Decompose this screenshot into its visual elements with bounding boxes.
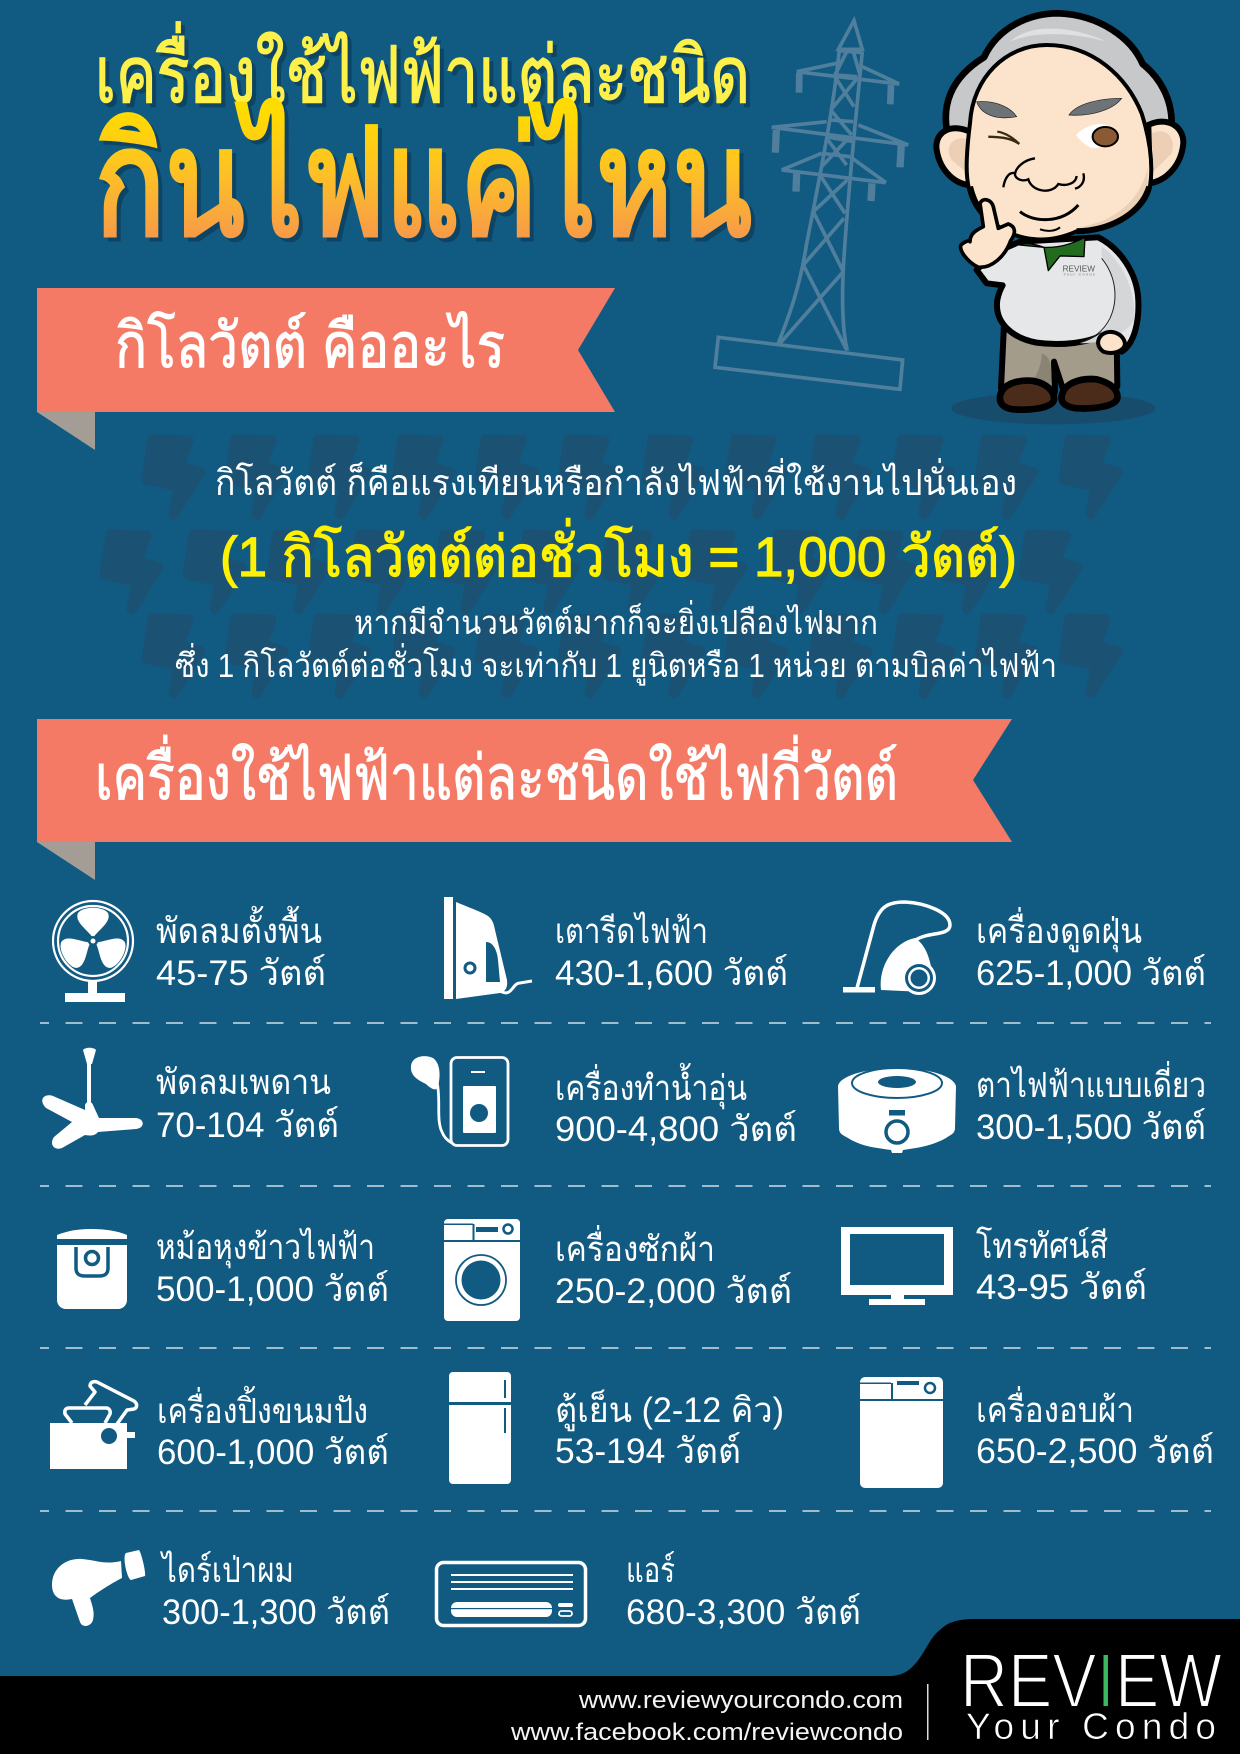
icon: hair dryer [52, 1550, 145, 1626]
footer links [510, 1687, 903, 1746]
watts: 300-1,300 วัตต์ [162, 1593, 390, 1632]
banner: what is a kilowatt: กิโลวัตต์ คืออะไร [115, 311, 505, 381]
jaw outline accent [970, 187, 1149, 231]
shirt [977, 237, 1138, 352]
label: พัดลมเพดาน [156, 1063, 331, 1102]
watts: 53-194 วัตต์ [555, 1432, 741, 1471]
item: rice cooker [57, 1227, 389, 1309]
mascot: old man in polo shirt [936, 13, 1183, 424]
label: ไดร์เป่าผม [159, 1550, 294, 1590]
banner: watts per appliance [37, 719, 1012, 880]
title [95, 22, 752, 267]
watts: 600-1,000 วัตต์ [157, 1433, 389, 1472]
label: ตาไฟฟ้าแบบเดี่ยว [976, 1061, 1206, 1105]
icon: clothes dryer [860, 1377, 943, 1488]
label: โทรทัศน์สี [976, 1226, 1108, 1266]
open eye [1076, 124, 1119, 148]
banner: what is a kilowatt [37, 288, 615, 450]
explanation text block: ซึ่ง 1 กิโลวัตต์ต่อชั่วโมง จะเท่ากับ 1 ยูนิตหรือ 1 หน่วย ตามบิลค่าไฟฟ้า [175, 643, 1057, 686]
icon: television [841, 1227, 953, 1305]
item: clothes dryer [860, 1377, 1214, 1488]
watts: 650-2,500 วัตต์ [976, 1432, 1214, 1471]
watts: 43-95 วัตต์ [976, 1268, 1147, 1307]
item: air conditioner [436, 1551, 861, 1632]
explanation text block [175, 458, 1057, 686]
item: television [841, 1226, 1147, 1307]
collar [1019, 237, 1085, 271]
hand on hip [1098, 332, 1125, 353]
watts: 70-104 วัตต์ [156, 1106, 339, 1145]
shirt logo: REVIEW [1063, 264, 1095, 273]
icon: air conditioner [436, 1562, 586, 1626]
label: พัดลมตั้งพื้น [156, 905, 322, 951]
icon: toaster [50, 1382, 137, 1469]
icon: washing machine [444, 1219, 520, 1321]
watts: 900-4,800 วัตต์ [555, 1110, 797, 1149]
shirt logo [1063, 264, 1096, 277]
label: เตารีดไฟฟ้า [555, 911, 708, 951]
icon: hotplate [838, 1068, 956, 1153]
explanation text block: (1 กิโลวัตต์ต่อชั่วโมง = 1,000 วัตต์) [220, 518, 1017, 588]
item: vacuum cleaner [843, 902, 1206, 995]
watts: 500-1,000 วัตต์ [156, 1270, 389, 1309]
shoes [1000, 379, 1117, 410]
icon: vacuum cleaner [843, 902, 950, 995]
title: กินไฟแค่ไหน [95, 99, 752, 267]
background lightning bolts [104, 439, 1118, 694]
ground shadow [951, 392, 1155, 424]
item: iron [444, 897, 788, 999]
winking eye [988, 132, 1019, 144]
electricity pylon [715, 21, 908, 389]
item: refrigerator [449, 1372, 784, 1484]
item: washing machine [444, 1219, 792, 1321]
item: standing fan [53, 901, 326, 1002]
footer bar [0, 1619, 1240, 1754]
watts: 45-75 วัตต์ [156, 954, 326, 993]
label: ตู้เย็น (2-12 คิว) [555, 1389, 784, 1431]
label: เครื่องอบผ้า [976, 1386, 1134, 1430]
pointing hand [961, 200, 1014, 267]
icon: refrigerator [449, 1372, 511, 1484]
logo: Review Your Condo: REVIEW [960, 1638, 1222, 1724]
ears [936, 122, 1183, 185]
footer links: www.facebook.com/reviewcondo [510, 1719, 903, 1746]
label: แอร์ [626, 1551, 675, 1590]
item: water heater [411, 1056, 797, 1149]
logo: Review Your Condo: Your Condo [966, 1706, 1216, 1747]
banner: watts per appliance: เครื่องใช้ไฟฟ้าแต่ละชนิดใช้ไฟกี่วัตต์ [95, 735, 898, 813]
nose and cheeks [1003, 158, 1084, 191]
watts: 250-2,000 วัตต์ [555, 1272, 792, 1311]
trousers [1001, 325, 1117, 392]
icon: ceiling fan [42, 1048, 143, 1149]
item: ceiling fan [42, 1048, 339, 1149]
watts: 625-1,000 วัตต์ [976, 954, 1206, 993]
icon: standing fan [53, 901, 133, 1002]
label: เครื่องทำน้ำอุ่น [555, 1062, 747, 1109]
label: เครื่องดูดฝุ่น [976, 907, 1142, 952]
icon: water heater [411, 1056, 508, 1146]
footer divider [927, 1684, 928, 1740]
explanation text block: กิโลวัตต์ ก็คือแรงเทียนหรือกำลังไฟฟ้าที่ใช้งานไปนั่นเอง [215, 458, 1017, 503]
hair [946, 13, 1172, 167]
shirt logo: Your Condo [1063, 272, 1096, 277]
label: เครื่องปิ้งขนมปัง [157, 1385, 368, 1431]
title: เครื่องใช้ไฟฟ้าแต่ละชนิด [95, 22, 750, 119]
item: toaster [50, 1382, 389, 1472]
face [967, 45, 1151, 239]
label: หม้อหุงข้าวไฟฟ้า [156, 1227, 375, 1268]
watts: 680-3,300 วัตต์ [626, 1593, 861, 1632]
explanation text block: หากมีจำนวนวัตต์มากก็จะยิ่งเปลืองไฟมาก [354, 600, 878, 641]
smile [1020, 205, 1078, 220]
watts: 300-1,500 วัตต์ [976, 1108, 1206, 1147]
icon: iron [444, 897, 532, 999]
label: เครื่องซักผ้า [555, 1225, 715, 1269]
icon: rice cooker [57, 1229, 127, 1309]
item: electric hotplate [838, 1061, 1206, 1153]
item: hair dryer [52, 1550, 390, 1632]
footer links: www.reviewyourcondo.com [578, 1687, 903, 1714]
eyebrows [977, 98, 1122, 118]
watts: 430-1,600 วัตต์ [555, 954, 788, 993]
